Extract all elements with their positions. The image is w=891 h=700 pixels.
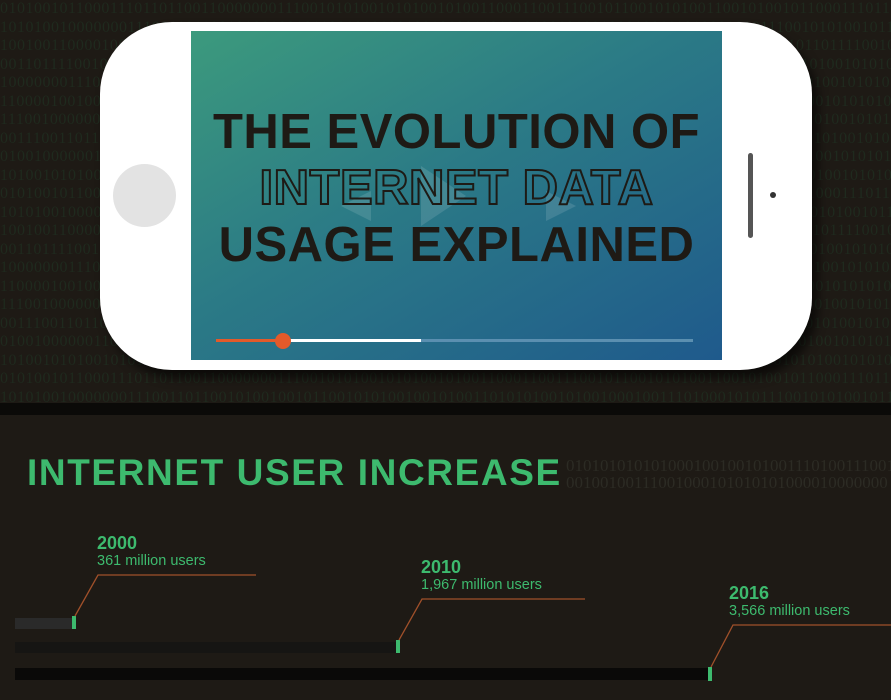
icon: play controls (faint) [342,166,576,226]
label 2010: 2010 [421,557,461,577]
label 2000: 361 million users [97,553,206,569]
bar 2000 [15,575,256,629]
phone [100,22,812,370]
label 2010 [421,557,542,593]
label 2016 [729,583,850,619]
binary text beside heading [566,457,891,491]
icon: camera dot [770,192,776,198]
band divider [0,403,891,415]
heading: internet user increase: INTERNET USER INCREASE [27,452,562,493]
bar 2016 [15,625,891,681]
title [213,105,700,272]
bar chart [15,533,891,681]
label 2016: 2016 [729,583,769,603]
icon: home button [113,164,176,227]
title: USAGE EXPLAINED [219,218,694,272]
label 2010: 1,967 million users [421,577,542,593]
label 2016: 3,566 million users [729,603,850,619]
screen [191,31,722,360]
icon: speaker slot [748,153,753,238]
bar 2010 [15,599,585,653]
title: THE EVOLUTION OF [213,105,700,159]
background: binary pattern [0,0,891,405]
label 2000: 2000 [97,533,137,553]
progress bar [216,333,693,349]
label 2000 [97,533,206,569]
